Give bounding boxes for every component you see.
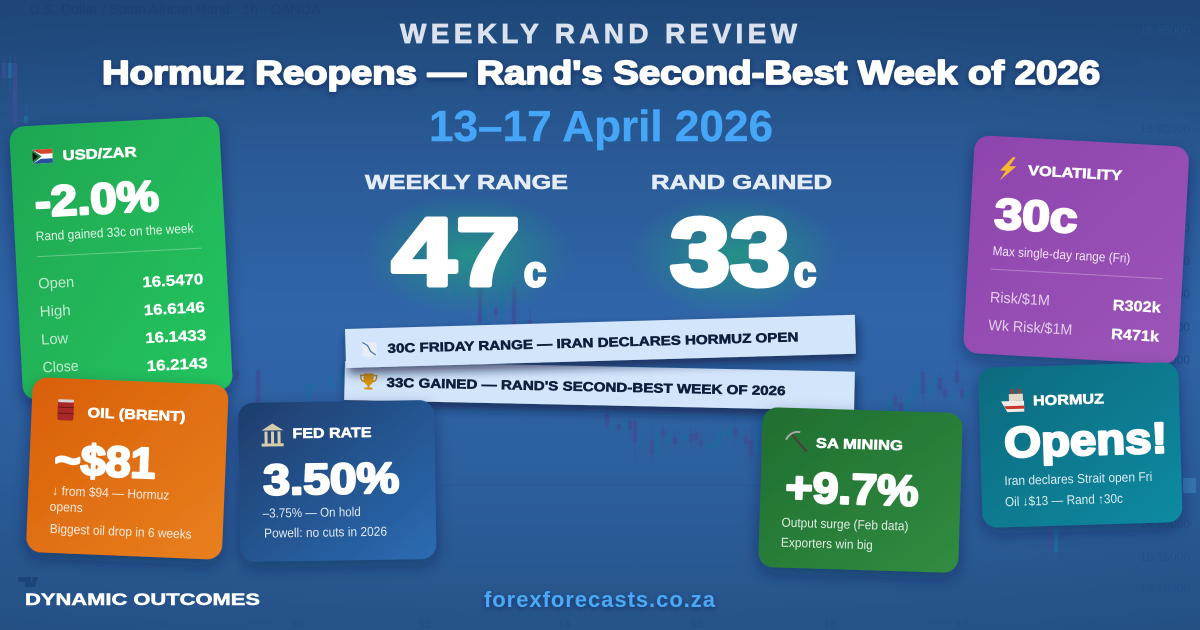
rows: risk (988, 289, 1162, 346)
subtext line 3: Biggest oil drop in 6 weeks (50, 521, 192, 542)
headline value: Opens! (1004, 414, 1168, 467)
chart price axis: 16.20000 (1140, 517, 1190, 531)
icon: ship (1001, 389, 1024, 412)
panel: USD/ZAR (9, 116, 233, 401)
date range: 13–17 April 2026 (429, 102, 773, 151)
stat unit: c (794, 248, 816, 296)
chart price axis: 16.55000 (1140, 287, 1190, 301)
chart price axis: 16.75000 (1140, 155, 1190, 169)
rows: risk: R302k (1112, 297, 1162, 317)
chart price axis: 16.10000 (1140, 582, 1190, 596)
banner text: 33C GAINED — RAND'S SECOND-BEST WEEK OF 2026 (386, 375, 786, 398)
subtext: Max single-day range (Fri) (992, 243, 1131, 266)
stat: rand gained (630, 172, 840, 317)
brand: dynamic outcomes: DYNAMIC OUTCOMES (25, 590, 260, 609)
subtext line 1: Iran declares Strait open Fri (1004, 469, 1153, 488)
card label: SA MINING (816, 435, 903, 453)
chart OHLC readout: O16.24392 H16.26652 L16.24323 C16.25699 +0.01317 (+0.08%) (384, 5, 690, 17)
card label: USD/ZAR (62, 143, 137, 163)
banner text: 30C FRIDAY RANGE — IRAN DECLARES HORMUZ OPEN (387, 329, 799, 356)
subtext line 2: Oil ↓$13 — Rand ↑30c (1005, 491, 1124, 509)
chart date axis (27, 617, 1097, 630)
icon: trophy (360, 373, 377, 390)
panel: fed rate (238, 400, 436, 562)
chart price axis: 16.45000 (1140, 353, 1190, 367)
chart price axis: 16.80000 (1140, 122, 1190, 136)
chart price axis: 16.50000 (1140, 320, 1190, 334)
rows: open high low close: High (39, 302, 71, 321)
panel: oil (26, 377, 229, 560)
stat label: RAND GAINED (651, 172, 832, 194)
rows: open high low close: 16.2143 (146, 355, 208, 375)
headline value: -2.0% (34, 172, 160, 227)
rows: open high low close: Low (41, 330, 69, 349)
subtext line 2: Powell: no cuts in 2026 (264, 524, 387, 541)
chart price axis: 16.90000 (1140, 56, 1190, 70)
banner: second-best week (344, 361, 855, 411)
stat unit: c (524, 248, 546, 296)
card label: VOLATILITY (1028, 162, 1123, 183)
banner: friday range (345, 315, 856, 368)
headline value: 3.50% (263, 454, 400, 505)
panel: hormuz (978, 362, 1183, 528)
TradingView logo mark (18, 577, 38, 587)
icon: South African flag (32, 149, 53, 164)
panel: SA mining (758, 407, 963, 573)
icon: falling chart (362, 342, 377, 357)
stat label: WEEKLY RANGE (365, 172, 568, 194)
headline value: ~$81 (54, 436, 157, 488)
chart price axis: 16.60000 (1140, 254, 1190, 268)
rows: open high low close: Open (38, 274, 75, 293)
chart price axis: 16.65000 (1140, 221, 1190, 235)
website url: forexforecasts.co.za (484, 587, 716, 612)
chart price axis: 16.70000 (1140, 188, 1190, 202)
subtext line 1: Output surge (Feb data) (781, 515, 909, 533)
chart price axis: 16.95000 (1140, 23, 1190, 37)
rows: risk: Wk Risk/$1M (988, 317, 1073, 339)
stat value: 47 (392, 199, 520, 306)
headline value: +9.7% (785, 464, 919, 516)
rows: risk: R471k (1111, 326, 1160, 346)
chart price axis: 16.15000 (1140, 550, 1190, 564)
headline value: 30c (993, 190, 1079, 243)
chart header text: U.S. Dollar / South African Rand · 1h · OANDA (30, 1, 321, 17)
rows: open high low close (38, 267, 208, 381)
subtext: Rand gained 33c on the week (35, 220, 194, 244)
subtext line 1: –3.75% — On hold (263, 504, 361, 521)
card label: OIL (BRENT) (87, 404, 186, 424)
rows: open high low close: 16.5470 (142, 271, 204, 291)
card label: HORMUZ (1033, 390, 1105, 408)
stat value: 33 (670, 199, 790, 306)
icon: lightning bolt (1000, 156, 1017, 181)
kicker: weekly rand review: WEEKLY RAND REVIEW (400, 18, 798, 49)
subtext line 2: opens (49, 499, 83, 515)
rows: open high low close: Close (42, 358, 79, 377)
subtext line 1: ↓ from $94 — Hormuz (52, 483, 170, 503)
panel: volatility (963, 135, 1190, 365)
chart price axis: 16.85000 (1140, 89, 1190, 103)
chart price axis (1140, 23, 1190, 596)
card label: FED RATE (292, 424, 372, 441)
icon: oil barrel (57, 399, 74, 421)
rows: risk: Risk/$1M (989, 289, 1050, 309)
title: Hormuz Reopens — Rand's Second-Best Week of 2026 (102, 54, 1100, 91)
stat: weekly range (363, 172, 573, 317)
icon: pick (786, 432, 807, 451)
rows: open high low close: 16.6146 (143, 299, 205, 319)
rows: open high low close: 16.1433 (145, 327, 207, 347)
subtext line 2: Exporters win big (781, 535, 873, 552)
icon: bank building (261, 423, 284, 447)
